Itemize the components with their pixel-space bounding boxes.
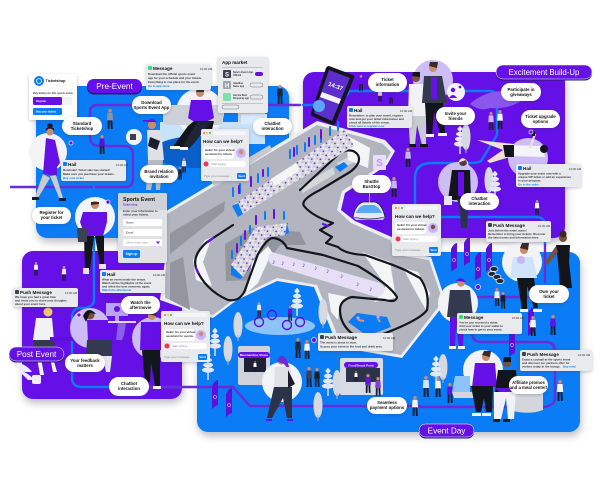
bubble: ticket upgrade options: options xyxy=(533,119,549,124)
hail card post event: Hail xyxy=(107,272,115,277)
hail card post event: 10:00 AM xyxy=(153,273,166,277)
hail card pre-event: Buy your ticket xyxy=(63,176,84,180)
push message card excitement: the latest news and information here. xyxy=(488,236,539,240)
app market card: S xyxy=(225,72,229,78)
bubble: ticket information: information xyxy=(376,82,400,87)
purple badge dots xyxy=(69,130,533,342)
person: woman in black xyxy=(545,230,572,288)
hail card pre-event: Reminder! Ticket sale has started! xyxy=(63,168,110,172)
person: man in pale sweater xyxy=(502,242,542,312)
bubble: invite your friends: Invite your xyxy=(445,111,467,116)
bubble: standard ticketshop: Standard xyxy=(73,121,92,126)
S logo sign: S xyxy=(376,158,383,169)
chat card excitement: How can we help? xyxy=(395,214,435,219)
hail card upgrade: Upgrade your event now with a xyxy=(518,172,561,176)
bubble: chatbot interaction excitement: Chatbot xyxy=(471,196,488,201)
phone with lock screen: 14:37 xyxy=(327,82,344,93)
bubble: download app xyxy=(132,96,171,114)
bubble: participate in giveaways: giveaways xyxy=(510,92,532,97)
push message card center: Access your event in the food and drink area. xyxy=(320,344,383,348)
chat card post event: assistant for events. xyxy=(166,334,194,338)
bubble: own your ticket: ticket xyxy=(543,294,555,299)
hail card excitement top: now and get your ticket information and xyxy=(349,117,404,121)
panel: post event background xyxy=(22,251,182,399)
hail card excitement top: check all details of the venue. xyxy=(349,120,390,124)
sports event form xyxy=(118,193,167,263)
bubble: brand relation invitation: Brand relation xyxy=(144,169,174,174)
small background people xyxy=(34,75,563,416)
bubble: chatbot interaction pre-event: Chatbot xyxy=(264,121,281,126)
app market card: Shopping app xyxy=(233,97,249,100)
app market card: News app xyxy=(233,85,245,88)
push message card affiliate: Push Message xyxy=(527,352,559,357)
push message card post event: about your event here. xyxy=(15,302,46,306)
app market card: Headline xyxy=(233,82,244,85)
push message card affiliate: Buy now! xyxy=(563,364,576,368)
panel: pre-event background xyxy=(36,86,289,238)
bubble: chatbot interaction excitement: interaction xyxy=(469,201,491,206)
trees xyxy=(202,124,501,421)
chat card excitement: assistant for tickets. xyxy=(397,227,425,231)
message card event day: 10:00 AM xyxy=(512,316,525,320)
message card event day: Add your ticket to your wallet to xyxy=(459,324,503,328)
bubble: seamless payment options: payment options xyxy=(370,405,405,410)
ticketshop card: Ticketshop xyxy=(46,79,66,83)
person: seated men event day xyxy=(452,350,543,422)
journey path lines xyxy=(11,91,555,407)
bubble: affiliate promos: Affiliate promos xyxy=(512,380,545,385)
sports event form: Name xyxy=(126,220,134,224)
person: man with phone post event xyxy=(132,310,174,389)
race track line xyxy=(195,150,428,335)
panel: event day background xyxy=(197,252,580,432)
food point booth xyxy=(340,358,383,395)
app market card: H xyxy=(225,84,229,90)
chat card post event xyxy=(161,311,210,362)
push message card post event: and invite you to share your thoughts xyxy=(15,298,67,302)
push message card post event: We hope you had a great time xyxy=(15,295,56,299)
push message card affiliate: and discover our partners offer for xyxy=(522,361,570,365)
chat card pre-event: assistant for tickets. xyxy=(205,152,233,156)
message card download: Download the official sports event xyxy=(148,72,195,76)
merchandise shop booth xyxy=(238,346,270,385)
bubble: chatbot interaction excitement xyxy=(460,193,499,210)
push message card affiliate: visitors today in the lounge. xyxy=(522,364,561,368)
bubble: standard ticketshop xyxy=(62,117,102,135)
push message card affiliate: 10:00 AM xyxy=(578,353,591,357)
monitor on desk xyxy=(106,303,136,340)
ticketshop card: Buy tickets for this sports event. xyxy=(33,91,73,95)
chat card post event: Send xyxy=(199,355,206,359)
lavender music strip: ♪ xyxy=(281,260,284,267)
bubble: your feedback matters xyxy=(65,354,105,372)
bubble: ticket upgrade options: Ticket upgrade xyxy=(525,114,556,119)
bubble: register for your ticket: Register for xyxy=(39,210,64,215)
chat card pre-event: Start typing... xyxy=(211,162,228,166)
bubble: ticket information xyxy=(368,73,407,92)
flags event day xyxy=(212,237,534,417)
pre-event lounge backdrop xyxy=(153,88,267,168)
bubble: register for your ticket xyxy=(32,207,71,224)
app market card: Official xyxy=(233,74,241,77)
hail card post event xyxy=(100,270,166,293)
bubble: seamless payment options: Seamless xyxy=(377,400,398,405)
hail card pre-event: 10:00 AM xyxy=(116,163,129,167)
chat card post event: Type your message... xyxy=(164,355,192,359)
person: dark hair woman with phone post event xyxy=(70,308,112,372)
app market card xyxy=(218,57,268,113)
message card download xyxy=(146,64,213,90)
label: post event: Post Event xyxy=(17,350,57,359)
bubble: shuttle bus stop xyxy=(352,175,391,193)
lavender music strip: ♪ xyxy=(272,259,276,266)
bubble: watch the aftermovie xyxy=(121,296,160,314)
bubble: chatbot interaction post event: Chatbot xyxy=(121,381,138,386)
merchandise shop booth: Merchandise Shops xyxy=(240,353,268,357)
hail card upgrade: Hail xyxy=(523,166,531,171)
chat card pre-event xyxy=(201,129,249,181)
label: excitement build-up xyxy=(496,65,592,80)
bubble: your feedback matters: matters xyxy=(77,363,93,368)
person: reclining woman with phone xyxy=(477,131,548,178)
phone with lock screen xyxy=(311,66,354,125)
ticketshop card: Buy your tickets xyxy=(36,110,57,114)
app market card: Get the Best xyxy=(233,94,247,97)
person: two men excitement xyxy=(408,60,465,147)
push message card post event: Push Message xyxy=(20,290,52,295)
person: man in dark hoodie xyxy=(438,278,478,349)
sports event form: Enter your information to xyxy=(123,209,158,213)
plant post event xyxy=(10,362,41,384)
bubble: participate in giveaways xyxy=(501,83,541,101)
bubble: ticket information: Ticket xyxy=(381,77,394,82)
bubble: watch the aftermovie: aftermovie xyxy=(130,305,152,310)
hail card excitement top: Remember: to plan your travel, register xyxy=(349,114,404,118)
lavender music strip: ♪ xyxy=(369,286,372,293)
app market card: Sports Event App xyxy=(233,71,254,74)
person: woman center event day xyxy=(262,356,302,421)
push message card excitement: Just before the event starts! xyxy=(488,228,527,232)
message card download: app for your schedule and your tickets. xyxy=(148,76,202,80)
message card event day xyxy=(457,313,525,334)
food point booth: Food/Snack Point xyxy=(348,363,374,367)
hail card excitement top: 10:00 AM xyxy=(400,109,413,113)
push message card affiliate: Enjoy a cocktail at the sports event xyxy=(522,358,570,362)
bubble: seamless payment options xyxy=(367,397,407,414)
bubble: brand relation invitation: invitation xyxy=(149,174,169,179)
push message card center xyxy=(318,333,396,351)
lavender music strip: ♪ xyxy=(356,281,360,288)
label: pre-event xyxy=(87,79,142,94)
bubble: chatbot interaction post event xyxy=(109,377,149,396)
bubble: affiliate promos xyxy=(509,376,548,394)
person: man with phone pre-event xyxy=(75,197,115,274)
bubble: chatbot interaction pre-event: interaction xyxy=(262,126,284,131)
hail card excitement top: Hail xyxy=(354,108,362,113)
chat card post event: Start typing... xyxy=(172,344,189,348)
hail card upgrade xyxy=(516,164,582,187)
hail card post event: Watch the aftermovie xyxy=(102,288,132,292)
sports event form: Sports Event xyxy=(123,197,155,203)
lavender music strip: ♪ xyxy=(326,268,330,275)
message card download: Everything in one place for the event. xyxy=(148,80,200,84)
push message card center: Push Message xyxy=(325,335,357,340)
person: woman in black jacket xyxy=(438,158,478,228)
S logo sign xyxy=(373,155,386,170)
bubble: own your ticket xyxy=(529,285,569,303)
bubble: watch the aftermovie: Watch the xyxy=(130,300,151,305)
chat card excitement xyxy=(392,204,441,256)
push message card center: The event is about to start. xyxy=(320,340,357,344)
bubble: participate in giveaways: Participate in xyxy=(508,87,535,92)
race track ground xyxy=(160,121,446,358)
hail card excitement top xyxy=(347,106,413,128)
label: event day: Event Day xyxy=(428,426,466,436)
shuttle bus xyxy=(353,193,385,220)
lavender music strip: ♪ xyxy=(292,261,296,268)
chat card pre-event: How can we help? xyxy=(203,139,243,144)
message card event day: You've just received a ticket. xyxy=(459,320,498,324)
push message card post event xyxy=(13,288,78,307)
bubble: download app: Sports Event App xyxy=(134,105,170,110)
chat card pre-event: Send xyxy=(238,174,245,178)
bubble: register for your ticket: your ticket xyxy=(41,215,63,220)
hail card post event: What an event inside the venue. xyxy=(102,278,146,282)
ticketshop card xyxy=(29,74,77,120)
app market card: App market xyxy=(222,60,248,65)
hail card excitement top: Click here to register now xyxy=(349,124,385,128)
hail card pre-event: Make sure you purchase your tickets. xyxy=(63,172,115,176)
lavender music strip: ♪ xyxy=(314,265,318,272)
label: excitement build-up: Excitement Build-Up xyxy=(509,68,580,77)
label: event day xyxy=(419,424,474,438)
label: post event xyxy=(9,347,64,362)
push message card excitement: 10:00 AM xyxy=(538,224,551,228)
chat card excitement: Send xyxy=(430,248,437,252)
push message card excitement: Remember to bring your tickets. Discover xyxy=(488,232,546,236)
push message card excitement xyxy=(486,221,551,242)
sports event form: Email xyxy=(126,230,134,234)
bubble: invite your friends: friends xyxy=(448,116,463,121)
push message card affiliate xyxy=(520,350,592,371)
chat card pre-event: Hello! I'm your virtual xyxy=(205,148,235,152)
lavender music strip: ♪ xyxy=(340,273,344,280)
person: seated man with phone xyxy=(170,88,214,150)
sports event form: Select ticket type xyxy=(126,240,148,244)
bubble: download app: Download xyxy=(141,100,162,105)
bubble: standard ticketshop: Ticketshop xyxy=(71,126,94,131)
message card event day: Message xyxy=(464,315,484,320)
lavender music strip: ♪ xyxy=(302,262,306,269)
message card download: Message xyxy=(153,66,173,71)
bubble: your feedback matters: Your feedback xyxy=(70,358,100,363)
chat card pre-event: Type your message... xyxy=(204,174,232,178)
bubble: affiliate promos: and a meal center! xyxy=(510,385,548,390)
bubble: own your ticket: Own your xyxy=(539,289,559,294)
hail card post event: and relive the best moments again. xyxy=(102,284,150,288)
panel: excitement build-up background xyxy=(303,72,565,238)
hail card upgrade: unique VIP ticket or add an experience xyxy=(518,175,571,179)
message card event day: check how to get to your event. xyxy=(459,328,502,332)
hail card upgrade: Go to the sales xyxy=(518,182,539,186)
pond with swimmers xyxy=(348,313,391,336)
ticketshop card: Register xyxy=(36,99,46,103)
bubble: shuttle bus stop: Shuttle xyxy=(364,179,379,184)
person: blonde seated woman post event xyxy=(33,308,100,375)
push message card post event: 10:00 AM xyxy=(65,291,78,295)
sports event form: select your tickets. xyxy=(123,212,149,216)
bubble: chatbot interaction post event: interaction xyxy=(118,386,140,391)
chat card excitement: Type your message... xyxy=(395,248,423,252)
grandstand two xyxy=(231,210,289,279)
chat card excitement: Start typing... xyxy=(403,237,420,241)
bubble: brand relation invitation xyxy=(140,165,178,183)
person: walking woman with phone xyxy=(29,123,67,201)
bubble: invite your friends xyxy=(436,107,475,125)
cyclists on cloud xyxy=(245,302,315,335)
bubble: chatbot interaction pre-event xyxy=(253,118,292,135)
chat card excitement: Hello! I'm your virtual xyxy=(397,223,427,227)
bubble: ticket upgrade options xyxy=(521,110,560,128)
chat card post event: How can we help? xyxy=(164,321,204,326)
ticket coins stack xyxy=(488,266,504,284)
push message card excitement: Push Message xyxy=(493,223,525,228)
hail card pre-event xyxy=(61,160,129,181)
sports event form: Ticket shop xyxy=(123,202,138,206)
clouds excitement xyxy=(470,91,530,109)
label: pre-event: Pre-Event xyxy=(96,82,133,91)
hail card pre-event: Hail xyxy=(68,162,76,167)
chat card post event: Hello! I'm your virtual xyxy=(166,330,196,334)
push message card center: 10:00 AM xyxy=(383,336,396,340)
person: man with cap and clipboard xyxy=(126,119,164,190)
lavender music strip xyxy=(268,252,385,297)
hail card post event: Watch all the highlights of the event xyxy=(102,281,151,285)
hail card upgrade: to your program. xyxy=(518,178,541,182)
bubble: shuttle bus stop: BusStop xyxy=(363,184,381,189)
message card download: 10:00 AM xyxy=(200,67,213,71)
hail card upgrade: 10:00 AM xyxy=(569,167,582,171)
message card download: Go to app store xyxy=(148,84,170,88)
grandstand one xyxy=(232,122,354,217)
sports event form: Sign up xyxy=(126,252,137,256)
